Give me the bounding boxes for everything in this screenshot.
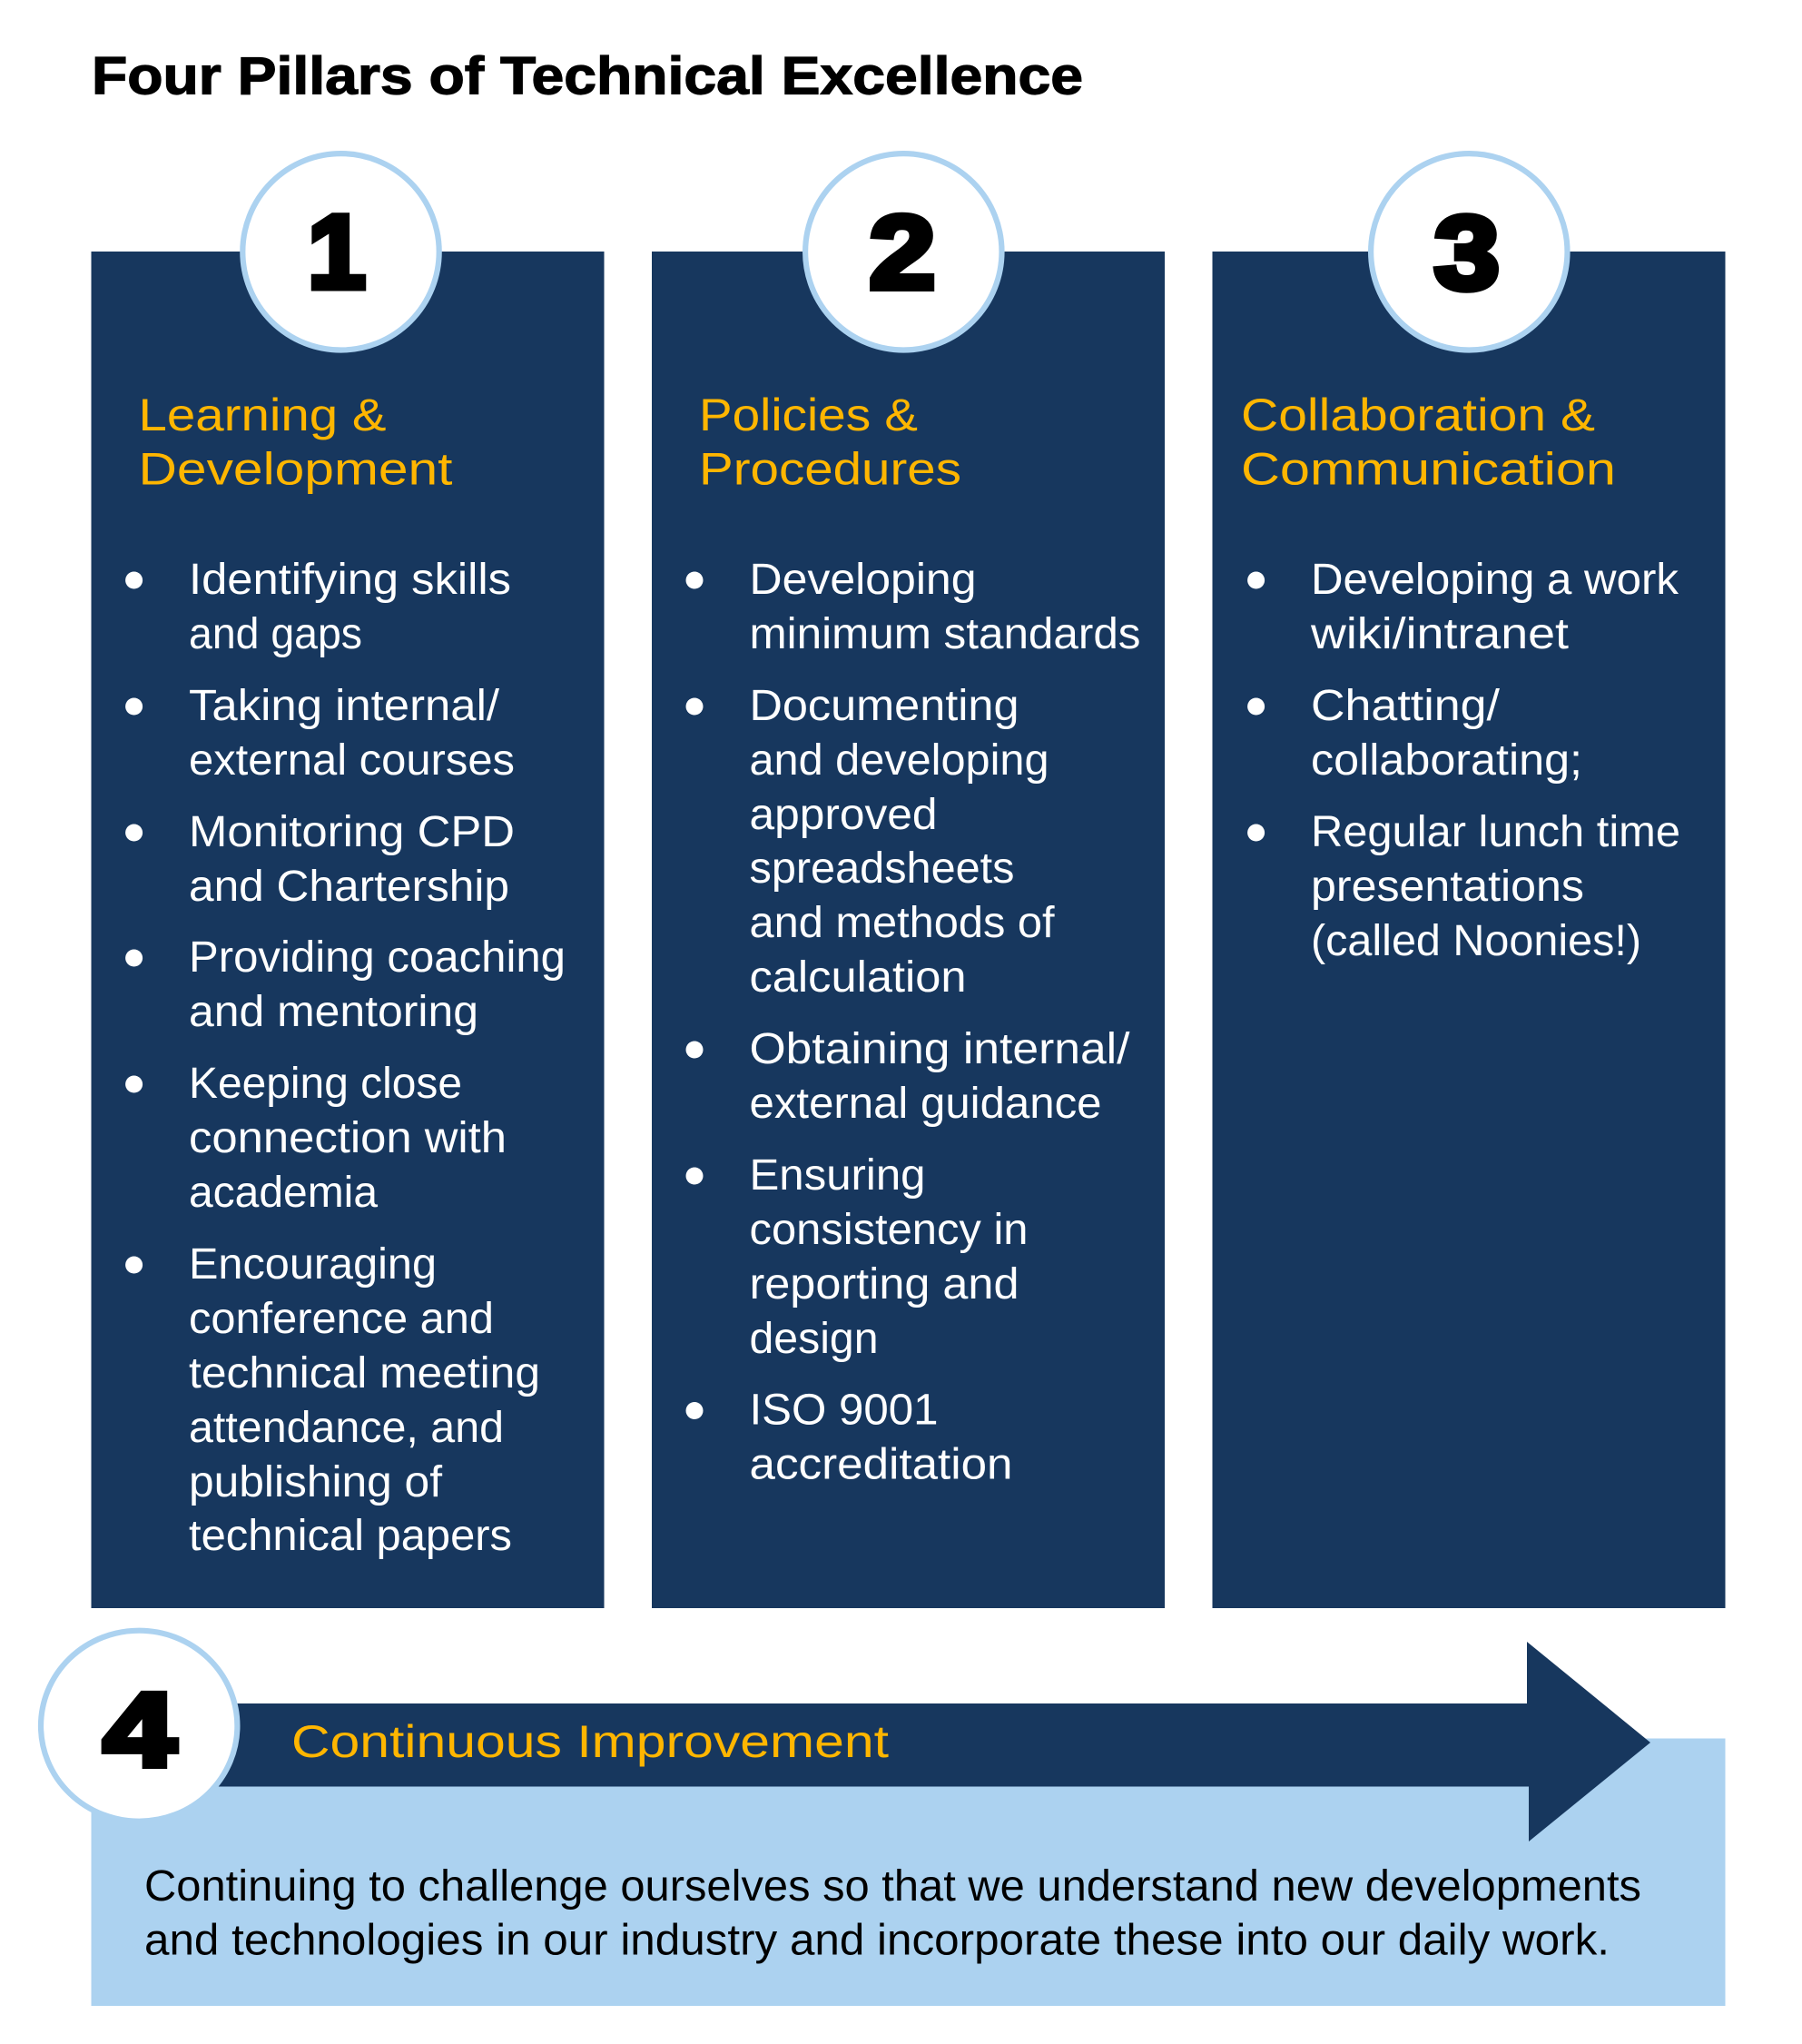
number badge 1: 1 bbox=[308, 194, 366, 311]
bullet list: learning and development: and gaps bbox=[189, 610, 362, 658]
bullet list: learning and development: technical meeting bbox=[189, 1349, 540, 1397]
bullet list: collaboration and communication: presentations bbox=[1311, 863, 1584, 911]
bullet list: collaboration and communication: (called Noonies!) bbox=[1311, 917, 1641, 965]
title: Four Pillars of Technical Excellence bbox=[92, 47, 1083, 105]
bullet list: learning and development: external courses bbox=[189, 736, 515, 785]
bullet list: policies and procedures: spreadsheets bbox=[750, 844, 1015, 893]
bullet list: learning and development: Encouraging bbox=[189, 1240, 437, 1289]
number badge 4 bbox=[41, 1631, 237, 1822]
bullet list: policies and procedures: and developing bbox=[750, 736, 1049, 785]
heading: collaboration and communication bbox=[1241, 390, 1616, 494]
bullet list: policies and procedures: accreditation bbox=[750, 1440, 1013, 1489]
number badge 2: 2 bbox=[870, 194, 935, 311]
bullet list: collaboration and communication: collaborating; bbox=[1311, 736, 1582, 785]
bullet list: policies and procedures: ISO 9001 bbox=[750, 1386, 939, 1435]
heading: policies and procedures: Procedures bbox=[699, 443, 961, 494]
bullet list: policies and procedures bbox=[686, 556, 1140, 1489]
description text bbox=[144, 1862, 1641, 1965]
bullet list: learning and development: Monitoring CPD bbox=[189, 808, 515, 856]
number badge 1 bbox=[242, 153, 439, 351]
heading: learning and development bbox=[138, 390, 453, 494]
bullet list: policies and procedures: reporting and bbox=[750, 1260, 1019, 1308]
bullet list: policies and procedures: Documenting bbox=[750, 682, 1019, 730]
number badge 2 bbox=[805, 153, 1002, 351]
arrow: continuous improvement: Continuous Improvement bbox=[291, 1716, 889, 1767]
heading: collaboration and communication: Communication bbox=[1241, 443, 1616, 494]
bullet list: collaboration and communication: Chatting/ bbox=[1311, 682, 1501, 730]
heading: collaboration and communication: Collaboration & bbox=[1241, 390, 1595, 440]
description text: and technologies in our industry and incorporate these into our daily work. bbox=[144, 1916, 1610, 1965]
bullet list: policies and procedures: external guidance bbox=[750, 1080, 1102, 1128]
bullet list: collaboration and communication: wiki/intranet bbox=[1310, 610, 1569, 658]
bullet list: policies and procedures: design bbox=[750, 1315, 879, 1363]
bullet list: learning and development: attendance, and bbox=[189, 1404, 504, 1452]
panel: pillar 3 collaboration and communication bbox=[1213, 153, 1725, 1608]
heading: learning and development: Learning & bbox=[138, 390, 387, 440]
bullet list: policies and procedures: approved bbox=[750, 791, 937, 839]
panel: pillar 1 learning and development bbox=[91, 153, 605, 1608]
bullet list: policies and procedures: Obtaining internal/ bbox=[750, 1025, 1130, 1073]
number badge 3: 3 bbox=[1434, 195, 1500, 311]
number badge 3 bbox=[1371, 153, 1568, 351]
bullet list: learning and development: connection with bbox=[189, 1114, 507, 1162]
bullet list: learning and development: Keeping close bbox=[189, 1060, 462, 1108]
bullet list: learning and development: academia bbox=[189, 1169, 378, 1217]
panel: pillar 4 continuous improvement bbox=[41, 1631, 1725, 2006]
bullet list: learning and development: Taking internal/ bbox=[189, 682, 500, 730]
number badge 4: 4 bbox=[103, 1673, 176, 1789]
bullet list: policies and procedures: minimum standards bbox=[750, 610, 1140, 658]
bullet list: learning and development: and Chartership bbox=[189, 863, 509, 911]
heading: policies and procedures bbox=[699, 390, 961, 494]
bullet list: learning and development: and mentoring bbox=[189, 988, 478, 1036]
bullet list: learning and development: conference and bbox=[189, 1295, 494, 1343]
bullet list: learning and development: Providing coaching bbox=[189, 933, 566, 982]
bullet list: policies and procedures: consistency in bbox=[750, 1206, 1028, 1254]
bullet list: policies and procedures: calculation bbox=[750, 953, 966, 1002]
bullet list: policies and procedures: and methods of bbox=[750, 899, 1055, 947]
panel: pillar 2 policies and procedures bbox=[652, 153, 1165, 1608]
bullet list: learning and development: Identifying skills bbox=[189, 556, 511, 604]
heading: policies and procedures: Policies & bbox=[699, 390, 918, 440]
arrow: continuous improvement bbox=[136, 1642, 1650, 1842]
bullet list: policies and procedures: Ensuring bbox=[750, 1151, 926, 1200]
bullet list: learning and development: publishing of bbox=[189, 1458, 443, 1506]
description text: Continuing to challenge ourselves so that we understand new developments bbox=[144, 1862, 1641, 1911]
bullet list: collaboration and communication bbox=[1247, 556, 1680, 965]
bullet list: collaboration and communication: Developing a work bbox=[1311, 556, 1679, 604]
bullet list: learning and development bbox=[125, 556, 566, 1560]
heading: learning and development: Development bbox=[138, 443, 453, 494]
bullet list: policies and procedures: Developing bbox=[750, 556, 977, 604]
bullet list: learning and development: technical papers bbox=[189, 1512, 512, 1560]
bullet list: collaboration and communication: Regular lunch time bbox=[1311, 808, 1680, 856]
